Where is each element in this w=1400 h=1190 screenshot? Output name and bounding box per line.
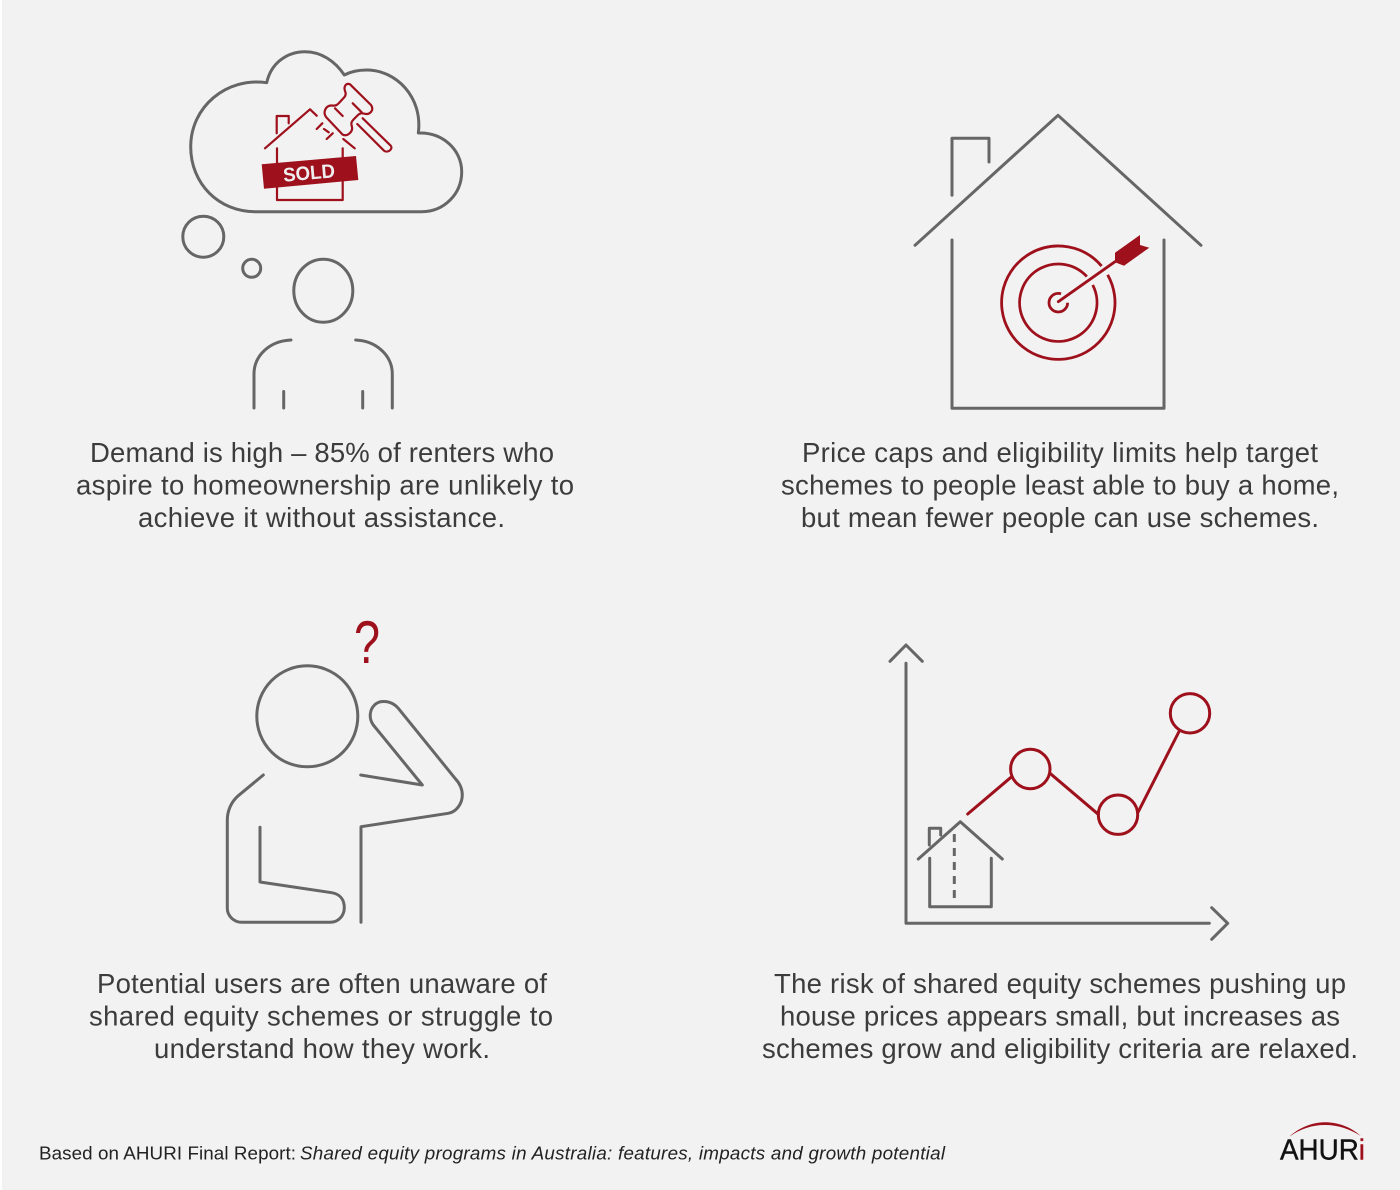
text: price caps: schemes to people least able to buy a home, xyxy=(781,470,1339,500)
text: price caps xyxy=(781,437,1339,533)
text: price caps: but mean fewer people can use schemes. xyxy=(801,502,1319,533)
small house xyxy=(918,822,1002,907)
footer source note: Shared equity programs in Australia: features, impacts and growth potential xyxy=(300,1142,946,1164)
panel: price caps xyxy=(781,115,1339,533)
icon: sold house xyxy=(265,109,355,200)
icon: confused person xyxy=(227,609,462,922)
question mark: ? xyxy=(354,609,380,676)
target rings xyxy=(981,225,1136,380)
person body xyxy=(227,701,462,922)
icon: house with target xyxy=(915,115,1201,408)
sold banner: SOLD xyxy=(282,160,336,187)
panel: house price risk xyxy=(762,645,1358,1064)
person head xyxy=(257,666,358,767)
icon: person thinking about a sold house xyxy=(183,52,462,408)
sold banner xyxy=(262,156,358,189)
icon: gavel xyxy=(317,84,391,152)
text: demand is high: aspire to homeownership are unlikely to xyxy=(76,470,574,500)
person xyxy=(254,259,392,408)
footer source note: Based on AHURI Final Report: xyxy=(39,1142,296,1164)
chart axes xyxy=(890,645,1228,939)
text: risk of pushing up prices: house prices appears small, but increases as xyxy=(780,1000,1340,1032)
text: risk of pushing up prices: The risk of shared equity schemes pushing up xyxy=(774,968,1346,999)
panel: awareness xyxy=(89,609,553,1064)
text: potential users: Potential users are often unaware of xyxy=(97,968,547,999)
text: potential users xyxy=(89,968,553,1064)
red trend line xyxy=(968,694,1210,834)
thought bubbles xyxy=(183,216,261,277)
logo: AHURI: AHURi xyxy=(1280,1134,1365,1166)
text: demand is high: achieve it without assistance. xyxy=(138,502,505,533)
text: risk of pushing up prices: schemes grow and eligibility criteria are relaxed. xyxy=(762,1033,1358,1064)
panel: demand xyxy=(76,52,574,533)
thought cloud xyxy=(191,52,462,212)
icon: line chart with house xyxy=(890,645,1228,939)
text: demand is high xyxy=(76,437,574,533)
text: potential users: understand how they work. xyxy=(154,1033,490,1064)
house outline xyxy=(915,115,1201,408)
text: price caps: Price caps and eligibility limits help target xyxy=(802,437,1318,468)
arrow xyxy=(1058,235,1149,302)
text: potential users: shared equity schemes or struggle to xyxy=(89,1000,553,1032)
text: demand is high: Demand is high – 85% of renters who xyxy=(90,437,554,468)
text: risk of pushing up prices xyxy=(762,968,1358,1064)
